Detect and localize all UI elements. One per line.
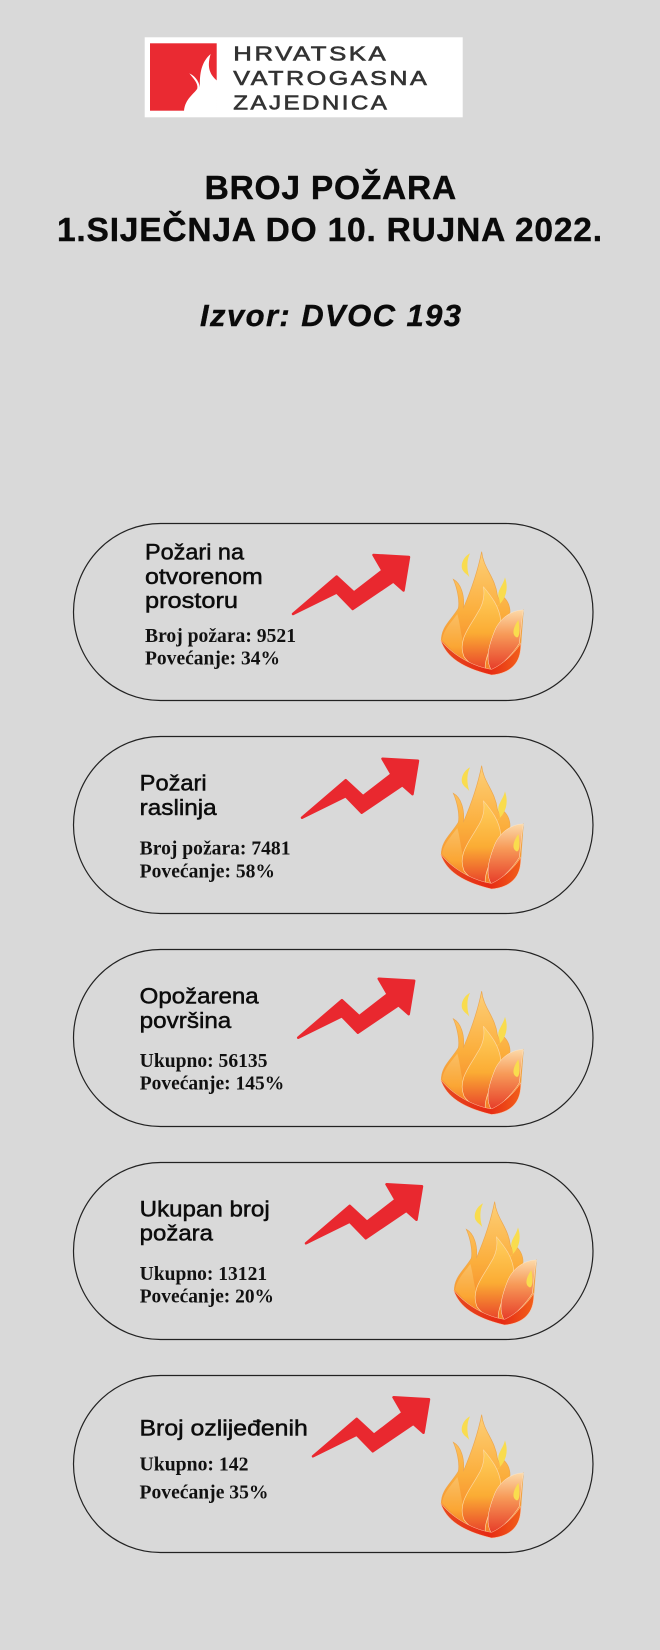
figures: Broj požara: 9521 xyxy=(145,626,296,647)
heading: prostoru xyxy=(145,588,238,613)
arrow xyxy=(302,759,418,818)
panel: Požari raslinja xyxy=(74,736,593,914)
heading: Opožarena xyxy=(140,984,259,1009)
heading xyxy=(145,539,263,613)
heading: Požari xyxy=(140,771,207,796)
heading: otvorenom xyxy=(145,564,263,589)
figures: Ukupno: 142 xyxy=(140,1455,248,1476)
icon: flame xyxy=(454,1202,536,1325)
title: 1.SIJEČNJA DO 10. RUJNA 2022. xyxy=(57,210,602,249)
panel: Opožarena površina xyxy=(74,950,593,1126)
figures: Povećanje 35% xyxy=(140,1482,268,1503)
heading: raslinja xyxy=(140,795,217,820)
figures: Ukupno: 13121 xyxy=(140,1264,267,1285)
icon: flame xyxy=(441,552,523,675)
figures: Povećanje: 20% xyxy=(140,1286,274,1307)
arrow xyxy=(293,555,409,614)
title: BROJ POŽARA xyxy=(205,169,456,207)
figures: Broj požara: 7481 xyxy=(140,838,290,859)
heading: površina xyxy=(140,1008,232,1033)
heading: Broj ozlijeđenih xyxy=(140,1416,308,1441)
title xyxy=(57,169,602,249)
heading: požara xyxy=(140,1221,214,1246)
logo wordmark: HRVATSKA xyxy=(233,44,388,66)
arrow xyxy=(306,1184,422,1243)
figures xyxy=(140,1455,268,1503)
figures xyxy=(140,1051,284,1095)
logo wordmark xyxy=(233,44,429,114)
icon: logo flame square xyxy=(150,43,217,111)
figures: Povećanje: 145% xyxy=(140,1074,284,1095)
figures: Povećanje: 34% xyxy=(145,648,280,670)
arrow xyxy=(298,979,414,1038)
heading xyxy=(140,984,259,1033)
panel: Broj ozlijeđenih xyxy=(74,1376,593,1552)
logo: Hrvatska vatrogasna zajednica xyxy=(145,37,463,117)
figures xyxy=(145,626,296,670)
heading xyxy=(140,771,217,820)
panel: Ukupan broj požara xyxy=(74,1162,593,1340)
figures xyxy=(140,1264,274,1307)
figures: Povećanje: 58% xyxy=(140,861,275,882)
icon: flame xyxy=(441,991,523,1114)
heading: Požari na xyxy=(145,539,244,564)
figures xyxy=(140,838,290,882)
icon: flame xyxy=(441,1415,523,1538)
source line: Izvor: DVOC 193 xyxy=(200,298,461,333)
icon: flame xyxy=(441,766,523,889)
heading: Ukupan broj xyxy=(140,1197,270,1222)
heading xyxy=(140,1197,270,1246)
logo wordmark: ZAJEDNICA xyxy=(233,92,389,114)
panel: Požari na otvorenom prostoru xyxy=(74,524,593,700)
arrow xyxy=(313,1397,429,1456)
figures: Ukupno: 56135 xyxy=(140,1051,268,1072)
logo wordmark: VATROGASNA xyxy=(233,68,429,90)
